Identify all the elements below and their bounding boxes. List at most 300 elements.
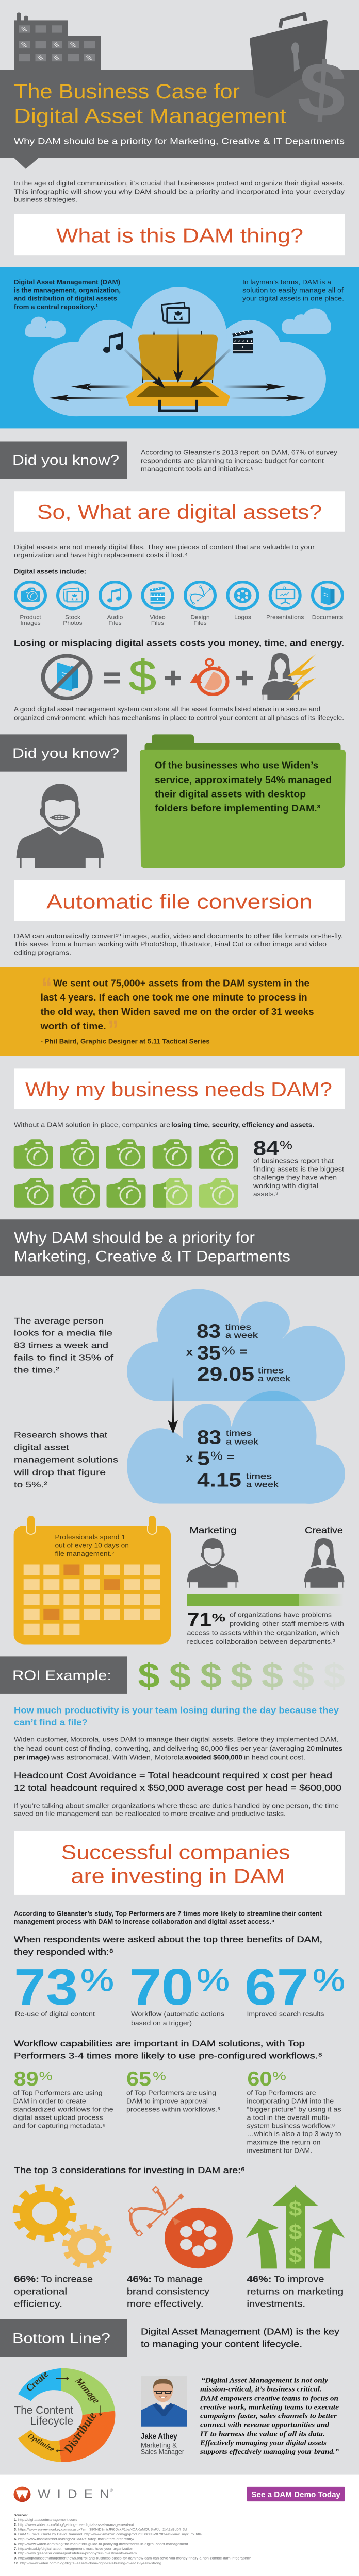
stat: 84%: of businesses report that	[253, 1157, 334, 1164]
sources list: http://digitalassetmanagementnews.org/roi-and-business-cases-for-dam/how-dam-can-save-you-money-finally-a-non-zombie-dam-infographic/	[18, 2556, 251, 2561]
caption: name and title	[141, 2432, 184, 2456]
large cloud	[33, 287, 326, 416]
calendar text: out of every 10 days on	[55, 1541, 129, 1549]
text: Gleanster study: management process with DAM to increase collaboration and digital asset access.⁸	[14, 1918, 274, 1925]
plus sign	[236, 671, 253, 685]
stat: 71%: reduces collaboration between departments.³	[187, 1638, 336, 1646]
stat: 89%: of Top Performers are using	[13, 2089, 103, 2096]
formula: headcount cost avoidance	[14, 1771, 341, 1793]
ring segment: distribute	[59, 2411, 115, 2462]
logo: Widen	[13, 2487, 113, 2502]
text: digital assets description	[14, 544, 315, 559]
layman's terms text: In layman’s terms, DAM is a	[242, 279, 332, 286]
caption	[14, 2274, 93, 2309]
stat: 60%: 60	[247, 2067, 272, 2090]
bar: 71%	[187, 1594, 344, 1606]
banner: ROI example: ROI Example:	[12, 1668, 111, 1684]
heading: Automatic file conversion: Automatic file conversion	[46, 890, 313, 913]
question: productivity	[14, 1705, 339, 1728]
calendar rings	[26, 1519, 157, 1534]
stat: 67%: 67	[244, 1958, 309, 2016]
quote text: last 4 years. If each one took me one minute to process in	[41, 992, 307, 1003]
heading band: why DAM should be a priority: Marketing, Creative & IT Departments	[14, 1248, 290, 1265]
text: Motorola case: Widen customer, Motorola, uses DAM to manage their digital assets. Before they implemented DAM,	[14, 1736, 338, 1743]
icon: presentations	[266, 582, 304, 620]
fading dollar signs: $	[138, 1656, 160, 1695]
icon: stock photos	[58, 582, 88, 626]
sources list: http://visual.ly/digital-asset-management-must-have-your-organization	[18, 2547, 133, 2551]
icon: green dollar: $	[129, 652, 156, 701]
equals sign	[104, 672, 120, 684]
ring labels: Create	[24, 2369, 51, 2394]
ring labels	[24, 2369, 102, 2455]
caption: brand consistency	[127, 2286, 210, 2297]
stat: 84%: %	[280, 1139, 292, 1152]
text: Motorola case: was astronomical. With Widen, Motorola	[51, 1754, 184, 1761]
heading: Successful companies	[14, 1831, 345, 1895]
attribution: - Phil Baird, Graphic Designer at 5.11 Tactical Series	[41, 1038, 210, 1045]
panel: customer quote	[0, 967, 359, 1056]
stat: 73%: %	[80, 1962, 114, 1997]
sources list: 10.	[14, 2561, 19, 2565]
sources list: http://www.widen.com/blog/the-marketers-guide-to-justifying-investments-in-digital-asset-management	[18, 2542, 188, 2546]
icon: stressed man	[16, 784, 104, 868]
sources list	[14, 2513, 251, 2565]
text: bottom line statement	[141, 2327, 340, 2349]
icon: audio files: Audio	[107, 615, 123, 620]
heading: Successful companies: are investing in DAM	[71, 1865, 285, 1887]
sources list: DAM Survival Guide by David Diamond: http://www.amazon.com/gp/product/B008BV879G/ref=kinw_myk_ro_title	[18, 2532, 202, 2536]
calculation: 83 x 5% = 4.15: %	[210, 1450, 223, 1463]
icon: stock photos: Stock	[65, 615, 80, 620]
text: research shows: will drop that figure	[13, 1468, 106, 1477]
calculation: 83 x 35% = 29.05: times	[225, 1323, 251, 1332]
text: research shows	[13, 1431, 118, 1489]
handwritten quote: “Digital Asset Management is not only	[201, 2377, 329, 2384]
quote marks	[41, 972, 119, 1046]
text: average person	[14, 1316, 113, 1375]
stat: 84%: assets.³	[253, 1191, 279, 1198]
sources list: Sources:	[14, 2513, 28, 2517]
intro text: This infographic will show you why DAM should be a priority and incorporated into your everyday	[14, 188, 345, 195]
stat: 89%: %	[39, 2070, 53, 2083]
fading dollar signs: $	[262, 1656, 283, 1695]
marketing vs creative	[187, 1526, 345, 1646]
callout text: respondents are planning to increase budget for content	[141, 457, 324, 464]
text: good DAM system	[14, 706, 344, 721]
stat: 73%: Re-use of digital content	[15, 2010, 95, 2018]
intro text: business strategies.	[14, 196, 77, 203]
text: digital assets description: Digital assets are not merely digital files. They are pieces of content that are valuable to your	[14, 544, 315, 551]
caption: To increase	[41, 2274, 93, 2284]
calculation: 83 x 35% = 29.05: times	[258, 1366, 284, 1375]
stat: 60%: %	[272, 2070, 286, 2083]
header: illustration and title band	[0, 12, 359, 169]
text: good DAM system: A good digital asset management system can store all the asset formats listed above in a secure and	[14, 706, 320, 713]
icon: woman	[304, 1538, 345, 1588]
sources list: http://digitalassetmanagement.com/	[18, 2518, 77, 2522]
icon: stock photos: Photos	[63, 621, 83, 626]
text: digital assets description: organization and have high replacement costs if lost.⁴	[14, 552, 188, 559]
ring title: Lifecycle	[30, 2414, 73, 2427]
calculation: 83 x 35% = 29.05: =	[239, 1345, 248, 1358]
icon: stopwatch	[190, 659, 227, 694]
handwritten quote: supports effectively managing your brand.”	[200, 2448, 339, 2456]
heading band: why DAM should be a priority: Why DAM should be a priority for	[14, 1229, 255, 1246]
handwritten quote: connect with revenue opportunities and	[200, 2421, 330, 2429]
heading: losing assets: Losing or misplacing digital assets costs you money, time, and energy.	[14, 638, 344, 648]
heading: What is this DAM thing?	[14, 214, 345, 255]
folder text: their digital assets with desktop	[155, 789, 306, 800]
intro text	[14, 180, 345, 203]
handwritten quote: campaigns faster, sales channels to better	[200, 2412, 337, 2420]
calculation: 83 x 35% = 29.05: a week	[258, 1374, 291, 1383]
text: without a DAM solution: Without a DAM solution in place, companies are	[14, 1121, 170, 1128]
text: average person: the time.²	[14, 1365, 59, 1375]
text: automatic conversion: DAM can automatically convert¹⁰ images, audio, video and documents to other file formats on-the-fly.	[14, 933, 343, 940]
quote marks: “	[41, 972, 52, 1003]
text: smaller organizations: If you’re talking about smaller organizations where these are duties handled by one person, the time	[14, 1802, 339, 1809]
icon: documents	[312, 582, 344, 620]
folder text	[155, 760, 332, 814]
caption: more effectively.	[127, 2299, 204, 2309]
title: The Business Case for	[14, 80, 240, 103]
ring title: The Content	[14, 2403, 74, 2416]
stat: 70%: based on a trigger)	[131, 2020, 192, 2027]
stat: 84%: 84	[253, 1137, 279, 1159]
text: average person: fails to find it 35% of	[14, 1353, 113, 1362]
stat: 84%: working with digital	[253, 1182, 318, 1190]
layman's terms text	[242, 279, 344, 302]
text: Motorola case: in head count cost.	[244, 1754, 305, 1761]
cloud: lower calculation	[127, 1391, 345, 1504]
stat: 60%: …which is also a top 3 way to	[247, 2130, 341, 2138]
icon: video files	[142, 582, 172, 626]
calculation: 83 x 5% = 4.15: x	[186, 1451, 193, 1464]
callout: did you know 1	[0, 441, 337, 479]
icon: growth arrows with dollars: $	[289, 2197, 302, 2221]
handwritten quote: creative work, marketing teams to execute	[200, 2403, 339, 2411]
subheading: digital assets include: Digital assets include:	[14, 568, 86, 575]
button: see a DAM demo: See a DAM Demo Today	[251, 2490, 340, 2499]
caption: name and title: Sales Manager	[141, 2448, 184, 2456]
text: smaller organizations: saved on file management can be reallocated to more creative and productive tasks.	[14, 1810, 286, 1818]
text: bottom line statement: Digital Asset Management (DAM) is the key	[141, 2327, 340, 2337]
text: Motorola case: avoided $600,000	[185, 1754, 242, 1761]
sources list: http://www.widen.com/blog/getting-to-a-digital-asset-management-roi	[18, 2523, 134, 2527]
stat: 71%: of organizations have problems	[230, 1611, 332, 1618]
calculation: 83 x 35% = 29.05: %	[222, 1345, 235, 1358]
text: bottom line statement: to managing your content lifecycle.	[141, 2340, 302, 2349]
stat: 89%: and for capturing metadata.⁸	[13, 2122, 106, 2129]
stat: 89%: DAM in order to create	[13, 2097, 86, 2105]
stat: 60%: “bigger picture” by using it as	[247, 2106, 341, 2113]
calculation: 83 x 5% = 4.15	[186, 1427, 279, 1491]
calculation: 83 x 35% = 29.05: x	[186, 1346, 193, 1358]
sources list: 3.	[14, 2528, 17, 2531]
stat: 84%: challenge they have when	[253, 1174, 337, 1181]
text: smaller organizations	[14, 1802, 339, 1818]
callout text: According to Gleanster’s 2013 report on DAM, 67% of survey	[141, 449, 337, 456]
icon: audio files: Files	[108, 621, 122, 626]
callout text: management tools and initiatives.⁸	[141, 465, 254, 472]
calendar text	[55, 1533, 129, 1557]
button: see a DAM demo	[247, 2487, 345, 2501]
title band with pointer	[0, 70, 359, 169]
calculation: 83 x 35% = 29.05: 35	[197, 1342, 221, 1364]
text: Gleanster study	[14, 1910, 322, 1925]
calendar text: file management.⁷	[55, 1550, 115, 1557]
quote text: worth of time.	[40, 1021, 106, 1032]
stat: 60%: investment for DAM.	[247, 2147, 312, 2154]
definition text	[14, 279, 121, 311]
icon: growth arrows with dollars: $	[289, 2220, 302, 2244]
heading: Successful companies: Successful companies	[61, 1841, 290, 1863]
ring segment: manage	[61, 2368, 115, 2415]
heading: So, What are digital assets?	[14, 491, 345, 532]
text: Motorola case: the head count cost of finding, converting, and delivering 80,000 files per year (averaging 20	[14, 1745, 315, 1752]
stat: 65%: of Top Performers are using	[126, 2089, 216, 2096]
icon: product images: Images	[20, 621, 41, 626]
sources list: 1.	[14, 2518, 17, 2522]
quote text	[40, 978, 314, 1032]
caption: name and title: Marketing &	[141, 2442, 177, 2449]
icon: crossed-out document	[43, 656, 91, 698]
banner: bottom line	[0, 2319, 127, 2357]
icon: design files	[185, 582, 215, 626]
caption: 46%:	[247, 2274, 272, 2284]
heading: So, What are digital assets?: So, What are digital assets?	[37, 501, 322, 523]
heading: Why my business needs DAM?	[14, 1068, 345, 1109]
folder text: folders before implementing DAM.³	[155, 803, 320, 814]
formula: headcount cost avoidance: 12 total headcount required x $50,000 average cost per head = $600,000	[14, 1783, 341, 1793]
icon: documents: Documents	[312, 615, 344, 620]
label: creative: Creative	[305, 1526, 343, 1536]
small right cloud	[282, 308, 331, 334]
text: research shows: to 5%.²	[14, 1480, 47, 1489]
caption: To manage	[154, 2274, 203, 2284]
text: without a DAM solution	[14, 1121, 314, 1128]
icon: video files: Video	[150, 615, 166, 620]
calculation: 83 x 5% = 4.15: times	[246, 1471, 272, 1481]
subheading: top three benefits: they responded with:⁸	[14, 1947, 113, 1957]
ring segment: optimize	[18, 2430, 61, 2462]
equation: lost file = money + time + energy	[43, 652, 316, 701]
callout text	[141, 449, 337, 472]
logo: Widen: ®	[110, 2488, 113, 2493]
definition text: Digital Asset Management (DAM)	[14, 279, 120, 286]
panel: green folder	[140, 734, 346, 868]
quote text: We sent out 75,000+ assets from the DAM system in the	[53, 978, 309, 989]
stat: 70%: Workflow (automatic actions	[131, 2010, 224, 2018]
sources list: http://www.mediastreet.ie/blog/2013/07/15/top-marketers-differently/	[18, 2537, 134, 2541]
stat: 65%: processes within workflows.⁸	[126, 2106, 220, 2113]
subheading: top three benefits	[14, 1935, 322, 1957]
text: research shows: Research shows that	[14, 1431, 107, 1439]
intro text: In the age of digital communication, it’s crucial that businesses protect and organize their digital assets.	[14, 180, 345, 187]
layman's terms text: your digital assets in one place.	[242, 295, 344, 302]
formula: headcount cost avoidance: Headcount Cost Avoidance = Total headcount required x cost per head	[14, 1771, 332, 1781]
folder text: service, approximately 54% managed	[155, 775, 332, 786]
stat: 65%	[126, 2067, 220, 2113]
ring labels: Manage	[72, 2376, 102, 2405]
handwritten quote	[200, 2377, 339, 2456]
calendar text: Professionals spend 1	[55, 1533, 125, 1541]
question: productivity: How much productivity is your team losing during the day because they	[14, 1705, 339, 1716]
stat: 65%: 65	[126, 2067, 151, 2090]
sources list: 6.	[14, 2542, 17, 2546]
text: research shows: management solutions	[14, 1455, 118, 1464]
caption: 66%:	[14, 2274, 39, 2284]
portrait: Jake Athey	[141, 2376, 187, 2427]
ring labels: Optimize	[26, 2432, 56, 2453]
sources list: http://www.widen.com/blog/digital-assets-done-right-celebrating-over-50-years-strong	[20, 2561, 161, 2565]
fading dollar signs: $	[231, 1656, 252, 1695]
text: automatic conversion: editing programs.	[14, 949, 71, 956]
chart: camera pictogram 84%	[14, 1139, 238, 1208]
label: marketing: Marketing	[190, 1526, 237, 1536]
callout: did you know 2: Did you know?	[12, 745, 119, 761]
plus sign	[165, 671, 181, 685]
stat: 84%	[253, 1137, 344, 1198]
footer background	[0, 2475, 359, 2576]
icon: dollar sign: $	[295, 45, 349, 134]
text: average person: 83 times a week and	[14, 1341, 108, 1350]
handwritten quote: Effectively managing your digital assets	[200, 2439, 327, 2447]
stat: 65%: DAM to improve approval	[126, 2097, 208, 2105]
sources list: 7.	[14, 2547, 17, 2551]
quote marks: ”	[108, 1014, 119, 1046]
consideration: brand consistency	[127, 2187, 233, 2309]
icon: design files: Design	[190, 615, 210, 620]
ring title	[14, 2403, 74, 2427]
heading: Automatic file conversion	[14, 880, 345, 921]
text: automatic conversion	[14, 933, 343, 956]
definition text: and distribution of digital assets	[14, 295, 117, 302]
caption	[247, 2274, 344, 2309]
stat: 73%: 73	[14, 1958, 78, 2016]
caption: returns on marketing	[247, 2286, 344, 2297]
subheading: workflow capabilities: Performers 3-4 times more likely to use pre-configured workflows.⁸	[14, 2051, 322, 2060]
caption	[127, 2274, 210, 2309]
stat: 67%: %	[313, 1962, 345, 1997]
layman's terms text: solution to easily manage all of	[242, 286, 344, 294]
calculation: 83 x 5% = 4.15: 4.15	[197, 1470, 241, 1491]
sources list: 8.	[14, 2551, 17, 2555]
fading dollar signs: $	[292, 1656, 314, 1695]
cloud: upper calculation	[127, 1289, 345, 1401]
icon: clapperboard	[232, 330, 253, 353]
text: automatic conversion: This saves from a human working with PhotoShop, Illustrator, Final Cut or other image and video	[14, 941, 327, 948]
handwritten quote: mission-critical, it’s business critical.	[200, 2385, 322, 2393]
text: Motorola case: minutes	[316, 1745, 342, 1752]
sources list: 2.	[14, 2523, 17, 2527]
quote text: the old way, then Widen saved me on the order of 31 weeks	[41, 1007, 314, 1018]
icon: logo disc with bezier curve	[128, 2187, 233, 2268]
panel: DAM definition	[0, 267, 359, 428]
caption: name and title: Jake Athey	[141, 2432, 177, 2441]
chart: content lifecycle ring	[14, 2368, 115, 2462]
icon: product images: Product	[20, 615, 42, 620]
ring labels: Distribute	[61, 2410, 100, 2455]
handwritten quote: IT to harness the value of all its data.	[200, 2430, 325, 2438]
stat: 70%: 70	[129, 1958, 193, 2016]
stat: 70%: %	[197, 1962, 230, 1997]
definition text: from a central repository.¹	[14, 303, 98, 311]
caption: operational	[14, 2286, 67, 2297]
sources list: https://www.surveymonkey.com/sr.aspx?sm=380NiD3mirJFt6DckP1baNOAKuMQUSnFJc_2bft2sBd04_3d	[18, 2528, 187, 2531]
stat: 89%: standardized workflows for the	[13, 2106, 113, 2113]
icon: photos	[161, 303, 189, 323]
fading dollar signs: $	[169, 1656, 191, 1695]
arrows into and out of suitcase	[48, 327, 306, 401]
callout: did you know 1: Did you know?	[12, 452, 119, 468]
folder text: Of the businesses who use Widen’s	[155, 760, 318, 771]
calculation: 83 x 35% = 29.05: 29.05	[197, 1364, 254, 1385]
stat: 70%	[129, 1958, 230, 2027]
calculation: 83 x 35% = 29.05	[186, 1321, 291, 1385]
sources list: 5.	[14, 2537, 17, 2541]
text: average person: The average person	[14, 1316, 104, 1326]
banner: bottom line: Bottom Line?	[12, 2331, 110, 2346]
icon: man	[187, 1538, 238, 1588]
text: Motorola case	[14, 1736, 342, 1761]
logo: Widen: WIDEN	[38, 2488, 109, 2501]
icon: product images	[15, 582, 45, 626]
fading dollar signs: $	[200, 1656, 222, 1695]
stat: 60%: of Top Performers are	[247, 2089, 316, 2096]
fading dollar signs	[138, 1656, 345, 1695]
callout: did you know 2	[0, 734, 127, 772]
stat: 60%: maximize the return on	[247, 2139, 321, 2146]
icon: briefcase	[252, 14, 325, 96]
text: without a DAM solution: losing time, security, efficiency and assets.	[171, 1121, 314, 1128]
calculation: 83 x 5% = 4.15: a week	[226, 1437, 259, 1446]
small left cloud	[25, 317, 66, 339]
text: good DAM system: organized environment, which has mechanisms in place to control your content at all phases of its lifecycle.	[14, 714, 344, 721]
panel: calendar	[14, 1519, 171, 1644]
consideration: returns on marketing	[246, 2185, 345, 2309]
heading band: why DAM should be a priority	[0, 1219, 359, 1276]
caption: To improve	[274, 2274, 324, 2284]
stat: 67%: Improved search results	[247, 2010, 324, 2018]
banner: ROI example	[0, 1656, 127, 1694]
subheading: workflow capabilities: Workflow capabilities are important in DAM solutions, with Top	[14, 2039, 305, 2048]
stat: 65%: %	[153, 2070, 166, 2083]
stat: 89%	[13, 2067, 113, 2129]
stat: 71%: 71	[187, 1609, 211, 1631]
icon: gears	[17, 2188, 109, 2266]
definition text: is the management, organization,	[14, 286, 121, 294]
text: Gleanster study: According to Gleanster’s study, Top Performers are 7 times more likely to streamline their content	[14, 1910, 322, 1917]
question: productivity: can’t find a file?	[14, 1718, 88, 1728]
icon row: digital asset types	[15, 582, 344, 626]
consideration: operational efficiency	[14, 2188, 109, 2309]
icon: growth arrows with dollars	[246, 2185, 345, 2268]
subtitle: Why DAM should be a priority for Marketing, Creative & IT Departments	[14, 136, 345, 146]
icon: design files: Files	[193, 621, 207, 626]
calculation: 83 x 5% = 4.15: 83	[197, 1427, 221, 1448]
calculation: 83 x 5% = 4.15: a week	[246, 1480, 279, 1489]
text: average person: looks for a media file	[14, 1329, 112, 1338]
calculation: 83 x 35% = 29.05: a week	[225, 1331, 258, 1340]
heading: Why my business needs DAM?: Why my business needs DAM?	[25, 1078, 332, 1100]
icon: logos	[228, 582, 258, 620]
text: research shows: digital asset	[14, 1443, 69, 1452]
stat: 60%	[247, 2067, 341, 2154]
calendar day grid	[24, 1564, 160, 1635]
ring segment: create	[18, 2368, 61, 2401]
